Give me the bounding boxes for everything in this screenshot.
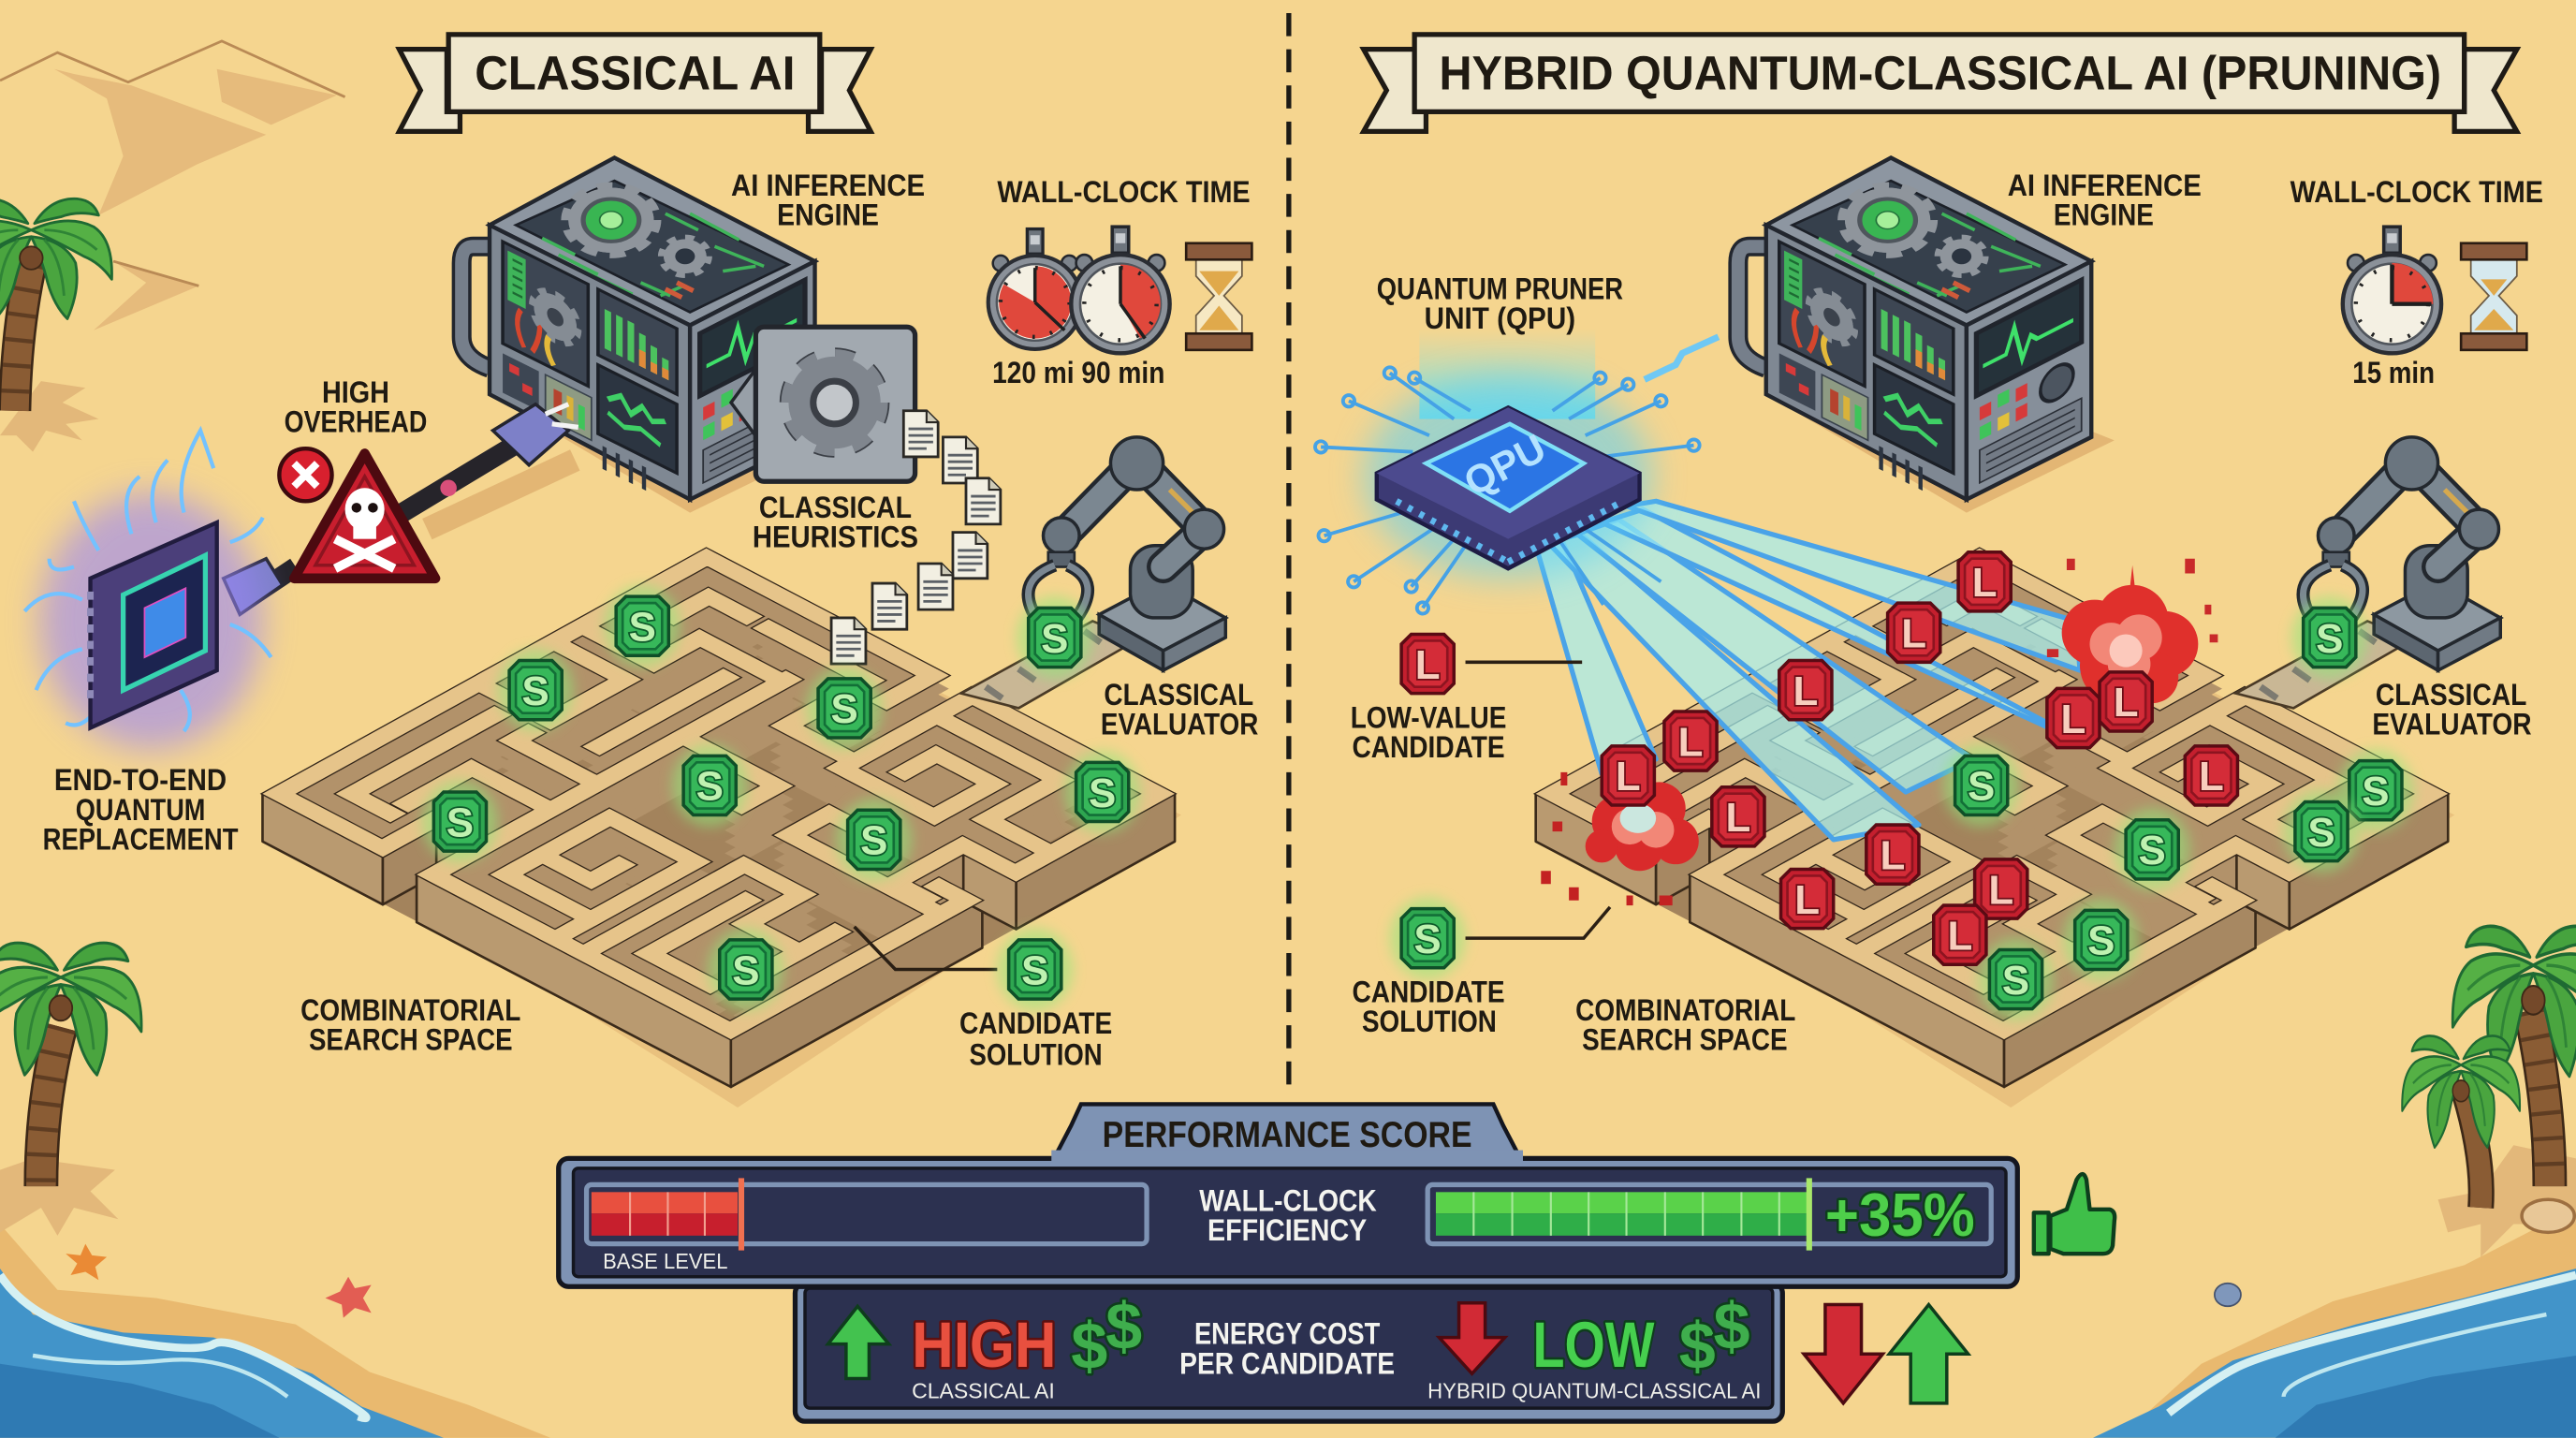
wall-clock efficiency label: WALL-CLOCK	[1199, 1184, 1377, 1218]
QPU chip: QPU	[1456, 426, 1553, 505]
icon: large green up arrow	[1889, 1305, 1969, 1403]
label: wall-clock time (classical): WALL-CLOCK TIME	[997, 175, 1251, 209]
classical heuristics gear panel	[731, 327, 915, 481]
icon: dollars classical	[1071, 1289, 1142, 1383]
label: wall-clock time (classical)	[992, 175, 1251, 389]
label: high overhead	[285, 375, 427, 439]
L tokens: hybrid: L	[1616, 754, 1641, 800]
low-value candidate legend	[1351, 634, 1582, 764]
explosion: upper	[2047, 559, 2217, 705]
label: candidate solution (classical): CANDIDATE	[959, 1006, 1112, 1040]
L tokens: hybrid: L	[2199, 754, 2224, 800]
S tokens: hybrid: S	[2316, 616, 2343, 662]
panel: energy cost	[795, 1284, 1782, 1421]
label: combinatorial search space (hybrid): COMBINATORIAL	[1575, 993, 1795, 1027]
L tokens: hybrid	[1602, 552, 2237, 964]
label: candidate solution (classical)	[959, 1006, 1112, 1071]
L tokens: hybrid: L	[1678, 719, 1703, 765]
label: classical evaluator (classical side)	[1101, 678, 1258, 741]
title banner: classical AI	[399, 35, 871, 131]
label: classical evaluator (hybrid side)	[2372, 678, 2532, 741]
candidate solution legend: hybrid: CANDIDATE	[1352, 976, 1505, 1009]
icon: large red down arrow	[1804, 1305, 1882, 1403]
label: quantum pruner unit: UNIT (QPU)	[1425, 301, 1575, 335]
title banner: classical AI: CLASSICAL AI	[475, 47, 795, 100]
green bar	[1427, 1178, 1991, 1251]
label: combinatorial search space (hybrid)	[1575, 993, 1795, 1057]
energy cost label: ENERGY COST	[1194, 1317, 1381, 1351]
sea bottom right	[2093, 1208, 2576, 1438]
icon: thumbs up	[2034, 1174, 2115, 1254]
hybrid caption: HYBRID QUANTUM-CLASSICAL AI	[1427, 1379, 1761, 1403]
energy cost label	[1179, 1317, 1395, 1380]
icon: dollars hybrid: $	[1679, 1309, 1716, 1383]
classical AI caption: CLASSICAL AI	[912, 1379, 1055, 1403]
L tokens: hybrid: L	[1880, 832, 1905, 878]
high overhead warning	[279, 448, 435, 579]
label: classical heuristics	[753, 491, 918, 553]
starfish and shells	[66, 1199, 2574, 1318]
wall-clock efficiency label: EFFICIENCY	[1208, 1213, 1368, 1247]
label: high overhead: HIGH	[322, 375, 389, 409]
wall-clock efficiency label	[1199, 1184, 1377, 1247]
low energy value: LOW	[1533, 1309, 1655, 1381]
candidate solution legend: hybrid: SOLUTION	[1362, 1005, 1497, 1038]
label: AI inference engine (hybrid): ENGINE	[2054, 198, 2154, 231]
label: AI inference engine (classical)	[731, 169, 925, 231]
S tokens: classical: S	[522, 668, 549, 714]
candidate solution legend: classical: S	[1021, 947, 1048, 993]
maze: hybrid search space	[1536, 557, 2454, 1108]
icon: low energy down arrow	[1439, 1303, 1505, 1373]
S tokens: classical: S	[696, 764, 724, 810]
label: AI inference engine (hybrid)	[2008, 169, 2202, 231]
hourglass: hybrid	[2461, 243, 2526, 350]
dunes top left	[0, 41, 345, 330]
panel: performance score	[559, 1104, 2017, 1286]
label: classical heuristics: CLASSICAL	[759, 491, 912, 524]
L tokens: hybrid: L	[1793, 668, 1818, 714]
label: wall-clock time (classical): 120 mi 90 min	[992, 356, 1164, 389]
sea bottom left	[0, 1225, 550, 1438]
robot arm: classical	[961, 437, 1225, 708]
S tokens: classical: S	[629, 604, 656, 650]
label: classical heuristics: HEURISTICS	[753, 520, 918, 553]
S tokens: hybrid: S	[2139, 828, 2166, 873]
L tokens: hybrid: L	[1972, 560, 1998, 606]
end-to-end quantum chip	[24, 431, 271, 749]
S tokens: hybrid: S	[2307, 810, 2335, 856]
icon: dollars classical: $	[1105, 1289, 1142, 1363]
base level caption: BASE LEVEL	[603, 1249, 728, 1273]
S tokens: classical: S	[446, 800, 474, 845]
QPU chip	[1315, 329, 1719, 614]
label: quantum pruner unit	[1377, 271, 1623, 335]
label: combinatorial search space (classical)	[300, 993, 520, 1057]
L tokens: hybrid: L	[2061, 697, 2086, 742]
L tokens: hybrid: L	[1901, 611, 1926, 657]
inference engine: classical	[461, 157, 838, 513]
label: high overhead: OVERHEAD	[285, 405, 427, 439]
label: combinatorial search space (classical): COMBINATORIAL	[300, 993, 520, 1027]
heading: PERFORMANCE SCORE	[1103, 1115, 1472, 1155]
icon: high energy up arrow	[828, 1306, 889, 1379]
candidate solution legend: hybrid: S	[1414, 917, 1442, 962]
L tokens: hybrid: L	[1794, 877, 1820, 923]
label: AI inference engine (classical): AI INFERENCE	[731, 169, 925, 202]
S tokens: classical: S	[732, 947, 759, 993]
maze: classical search space	[262, 557, 1181, 1108]
pruning beams	[1534, 501, 2088, 840]
icon: dollars classical: $	[1071, 1309, 1107, 1383]
red bar	[587, 1178, 1147, 1251]
icon: dollars hybrid: $	[1714, 1289, 1750, 1363]
label: classical evaluator (classical side): EVALUATOR	[1101, 708, 1258, 741]
inference engine: hybrid	[1738, 157, 2115, 513]
S tokens: hybrid: S	[2087, 918, 2115, 964]
S tokens: hybrid	[1943, 596, 2413, 1020]
score value: +35%	[1825, 1181, 1975, 1249]
candidate solution legend: classical	[855, 927, 1073, 1010]
S tokens: classical: S	[860, 818, 887, 864]
L tokens: hybrid: L	[1725, 795, 1750, 841]
label: quantum pruner unit: QUANTUM PRUNER	[1377, 271, 1623, 305]
low-value candidate legend: LOW-VALUE	[1351, 701, 1506, 735]
label: wall-clock time (hybrid): 15 min	[2352, 356, 2435, 389]
tab	[1051, 1104, 1523, 1164]
label: end-to-end quantum replacement: QUANTUM	[76, 793, 205, 827]
main frame	[559, 1158, 2017, 1286]
low-value candidate legend: CANDIDATE	[1352, 730, 1505, 764]
explosion: lower	[1541, 772, 1699, 905]
S tokens: classical: S	[1089, 770, 1116, 816]
label: combinatorial search space (hybrid): SEARCH SPACE	[1582, 1023, 1788, 1057]
documents trail	[831, 411, 1001, 664]
clock: hybrid	[2343, 227, 2441, 353]
label: classical evaluator (classical side): CLASSICAL	[1104, 678, 1253, 712]
title banner: hybrid	[1364, 35, 2517, 131]
candidate solution legend: hybrid	[1352, 897, 1610, 1038]
label: end-to-end quantum replacement: REPLACEMENT	[43, 822, 239, 856]
label: classical evaluator (hybrid side): EVALUATOR	[2372, 708, 2532, 741]
S tokens: classical: S	[1041, 616, 1068, 662]
L tokens: hybrid: L	[1947, 913, 1972, 959]
label: AI inference engine (classical): ENGINE	[777, 198, 879, 231]
label: classical evaluator (hybrid side): CLASSICAL	[2376, 678, 2526, 712]
S tokens: classical: S	[830, 686, 858, 732]
S tokens: hybrid: S	[2002, 958, 2029, 1004]
palm tree bottom left	[0, 943, 141, 1236]
label: combinatorial search space (classical): SEARCH SPACE	[309, 1023, 513, 1057]
S tokens: hybrid: S	[1968, 764, 1995, 810]
label: end-to-end quantum replacement: END-TO-END	[54, 763, 227, 797]
L tokens: hybrid: L	[2114, 680, 2139, 726]
hourglass: classical	[1186, 243, 1251, 350]
high energy value: HIGH	[912, 1309, 1057, 1381]
icon: dollars hybrid	[1679, 1289, 1750, 1383]
S tokens: hybrid: S	[2362, 769, 2390, 814]
L tokens: hybrid: L	[1988, 867, 2013, 913]
label: wall-clock time (hybrid): WALL-CLOCK TIME	[2291, 175, 2543, 209]
label: candidate solution (classical): SOLUTION	[970, 1037, 1103, 1071]
energy cost label: PER CANDIDATE	[1179, 1346, 1395, 1380]
label: AI inference engine (hybrid): AI INFERENCE	[2008, 169, 2202, 202]
palm trees right	[2402, 926, 2576, 1257]
palm tree top left	[0, 198, 111, 452]
cable from chip to engine	[224, 404, 578, 614]
label: wall-clock time (hybrid)	[2291, 175, 2543, 389]
clocks: classical	[988, 227, 1170, 353]
title banner: hybrid: HYBRID QUANTUM-CLASSICAL AI (PRUNING)	[1439, 47, 2441, 100]
center divider	[1287, 13, 1290, 1088]
low-value candidate legend: L	[1415, 642, 1441, 688]
robot arm: hybrid	[2236, 437, 2500, 708]
label: end-to-end quantum replacement	[43, 763, 239, 856]
S tokens: classical	[422, 585, 1140, 1010]
